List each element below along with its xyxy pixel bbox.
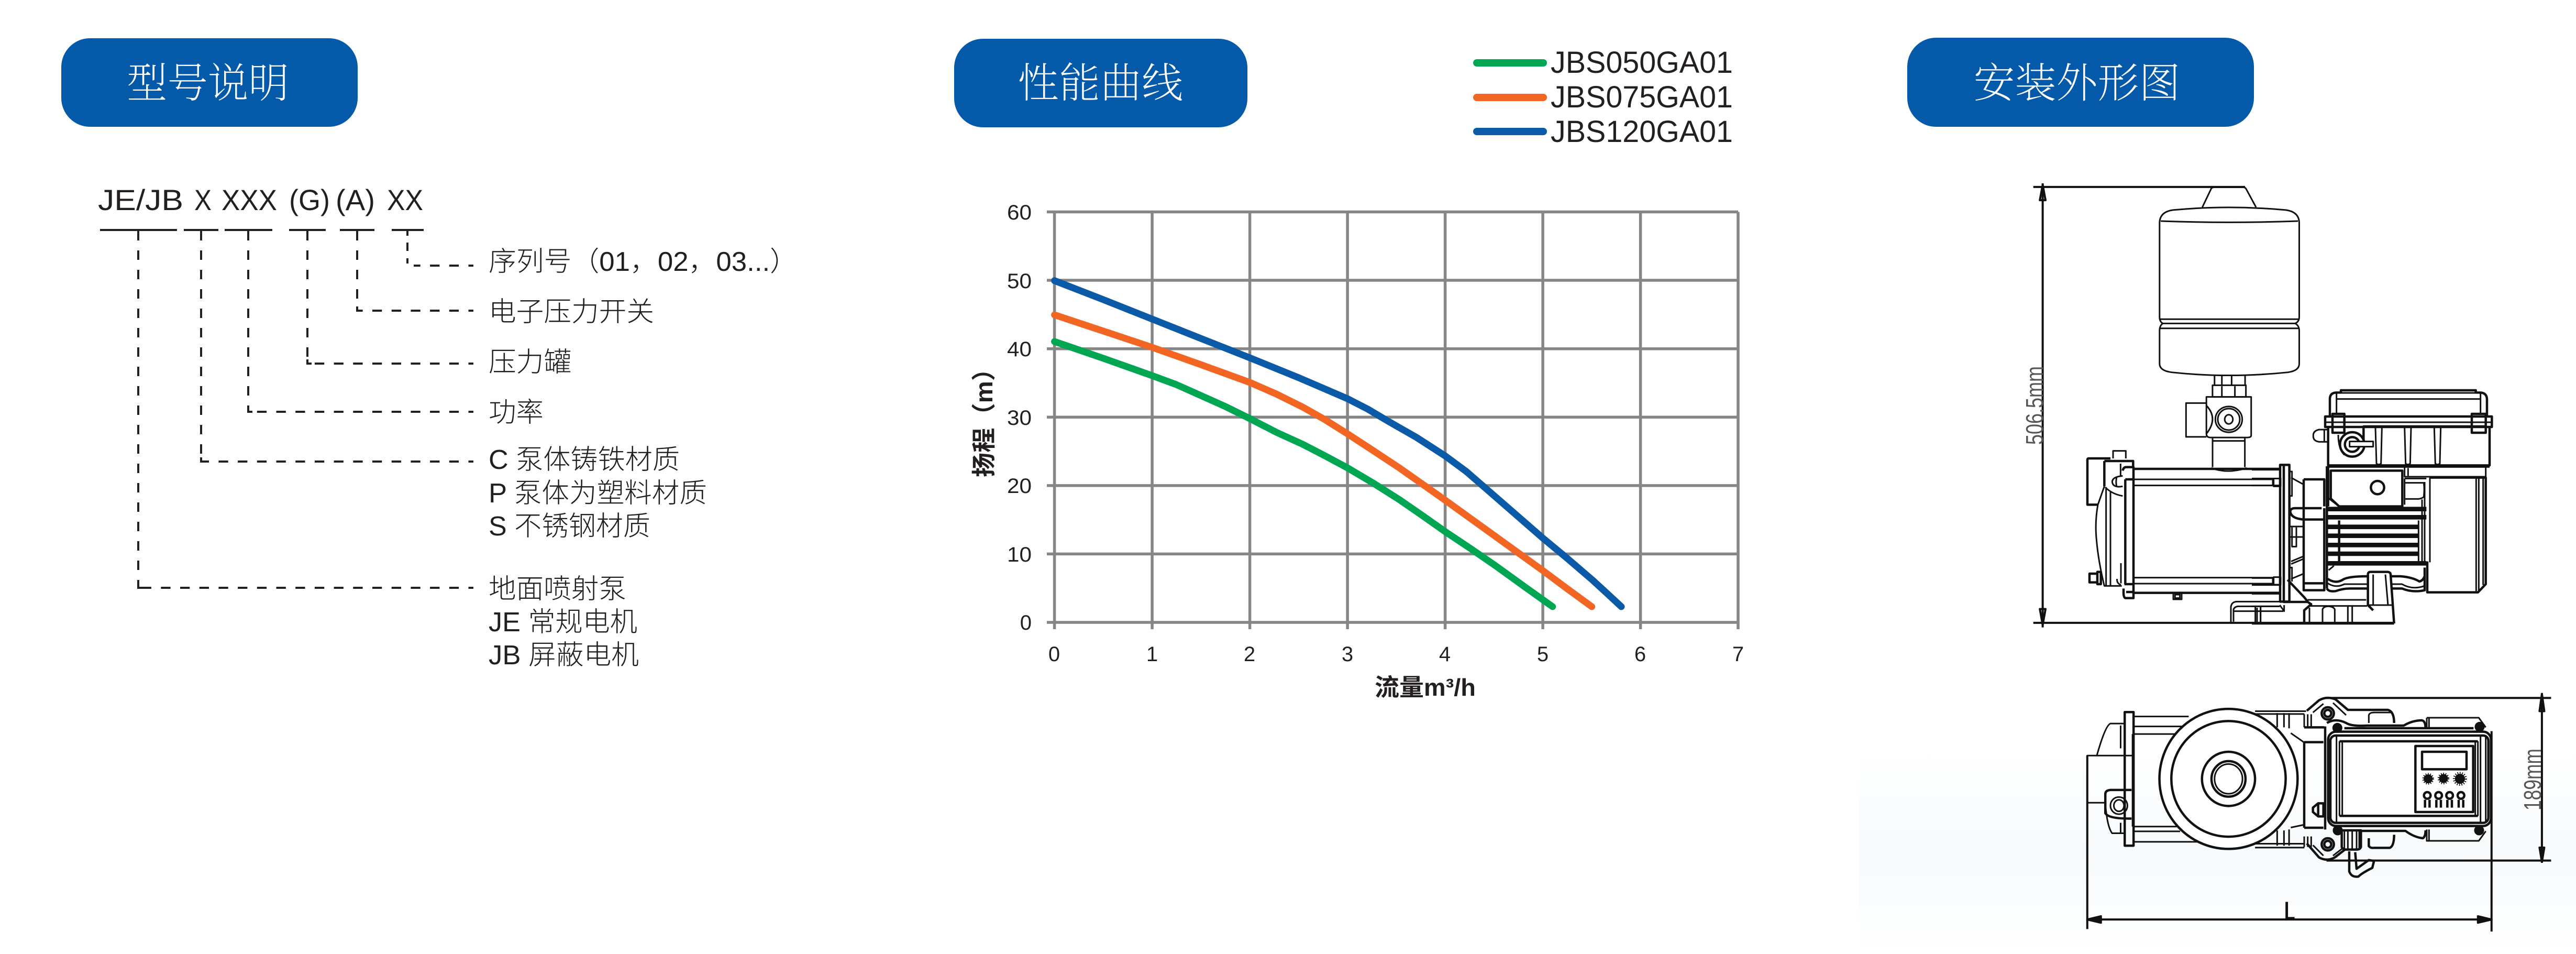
upper lug	[2304, 698, 2426, 728]
drawing: tank, valve and height dimension	[2033, 183, 2394, 628]
panel: performance curves	[954, 39, 1744, 701]
mounting foot and base	[2252, 572, 2394, 623]
end cap and bolts	[2087, 458, 2133, 505]
x axis tick labels: 4	[1439, 643, 1451, 666]
corner screws	[2333, 722, 2484, 835]
y axis tick labels: 40	[1007, 338, 1032, 361]
heading: 安装外形图: 安装外形图	[1973, 61, 2181, 107]
drain plug	[2173, 594, 2182, 599]
y axis tick labels	[1007, 201, 1032, 634]
dimension: 189mm: 189mm	[2519, 749, 2546, 810]
y axis tick labels: 30	[1007, 407, 1032, 430]
drawing: pump top view, inlet side	[2087, 693, 2551, 931]
width and length dimension lines	[2087, 693, 2551, 931]
model code line: X	[194, 183, 212, 216]
label: surface jet pump and motor types: 地面喷射泵	[489, 574, 626, 605]
label: surface jet pump and motor types: JB 屏蔽电机	[489, 640, 639, 671]
valve and fitting	[2186, 375, 2251, 437]
x axis tick labels: 7	[1732, 643, 1744, 666]
label: electronic pressure switch: 电子压力开关	[489, 297, 654, 327]
pump discharge rings	[2160, 709, 2297, 849]
indicator lights	[2424, 773, 2466, 784]
x axis title: 流量m³/h	[1375, 674, 1476, 701]
cooling fins	[2327, 466, 2426, 588]
panel: installation dimensions	[1907, 38, 2551, 931]
x axis tick labels: 1	[1146, 643, 1158, 666]
curve: JBS050GA01	[1055, 342, 1553, 607]
dimension: 506.5mm: 506.5mm	[2021, 366, 2048, 445]
label: pump body materials: C 泵体铸铁材质	[489, 445, 680, 475]
code underlines and dashed leader lines	[100, 230, 473, 588]
label: pressure tank: 压力罐	[489, 347, 571, 378]
x axis tick labels	[1048, 643, 1744, 666]
x axis tick labels: 5	[1537, 643, 1549, 666]
end flange	[2122, 467, 2133, 598]
curve: JBS120GA01	[1055, 281, 1621, 607]
x axis tick labels: 3	[1342, 643, 1353, 666]
model code line: JE/JB	[98, 183, 183, 216]
y axis title: 扬程（m）	[970, 356, 998, 477]
dimension: L: L	[2284, 897, 2295, 925]
chart legend: JBS075GA01	[1551, 80, 1733, 114]
label: serial number: 序列号（01，02，03...）	[489, 247, 798, 277]
pump flange	[2252, 465, 2308, 601]
chart legend	[1477, 46, 1733, 149]
label: pump body materials: S 不锈钢材质	[489, 511, 650, 542]
side plates	[2427, 718, 2486, 841]
motor housing bottom	[2327, 566, 2425, 591]
display screen	[2422, 752, 2467, 769]
fan cover	[2427, 478, 2486, 593]
y axis tick labels: 10	[1007, 543, 1032, 566]
label: pump body materials: P 泵体为塑料材质	[489, 478, 707, 509]
label: surface jet pump and motor types	[489, 574, 639, 671]
base left part	[2231, 601, 2283, 622]
controller lid	[2313, 390, 2492, 465]
heading: 型号说明: 型号说明	[127, 61, 289, 107]
y axis tick labels: 0	[1020, 611, 1032, 634]
heading: 型号说明	[61, 38, 358, 127]
x axis tick labels: 6	[1634, 643, 1646, 666]
model code line: XXX	[222, 183, 277, 216]
drawing: pump body side view	[2087, 438, 2283, 622]
display panel	[2415, 746, 2473, 812]
controller outline	[2325, 727, 2491, 829]
height dimension lines	[2033, 183, 2394, 628]
curve: JBS075GA01	[1055, 315, 1592, 607]
chart legend: JBS050GA01	[1551, 46, 1733, 80]
drawing: controller top view	[2304, 698, 2491, 877]
x axis tick labels: 0	[1048, 643, 1060, 666]
panel: model designation	[61, 38, 798, 671]
pressure tank	[2160, 187, 2299, 376]
model code line: (A)	[336, 183, 375, 216]
model code line: (G)	[289, 183, 330, 216]
discharge pipe	[2212, 438, 2247, 471]
x axis tick labels: 2	[1244, 643, 1255, 666]
heading: 性能曲线	[954, 39, 1247, 127]
cable gland and lead	[2342, 830, 2374, 877]
flange bars between body and motor	[2255, 711, 2306, 848]
heading: 性能曲线: 性能曲线	[1018, 61, 1183, 107]
body and tie rods	[2134, 469, 2281, 593]
chart legend: JBS120GA01	[1551, 115, 1733, 149]
drawing: motor and controller side view	[2252, 390, 2492, 623]
model code line	[98, 183, 423, 216]
label: power: 功率	[489, 398, 544, 428]
y axis tick labels: 60	[1007, 201, 1032, 224]
label: surface jet pump and motor types: JE 常规电机	[489, 607, 637, 638]
coupling and elbow	[2290, 478, 2324, 590]
label: pump body materials	[489, 445, 707, 542]
model code line: XX	[387, 183, 423, 216]
motor terminal block	[2327, 467, 2490, 507]
keypad buttons	[2424, 792, 2464, 808]
heading: 安装外形图	[1907, 38, 2254, 127]
neck between pump and controller	[2304, 727, 2324, 828]
y axis tick labels: 50	[1007, 270, 1032, 293]
y axis tick labels: 20	[1007, 475, 1032, 498]
lower lug	[2304, 830, 2426, 860]
line chart: head vs flow	[970, 201, 1744, 701]
inlet and end cap	[2087, 712, 2199, 846]
